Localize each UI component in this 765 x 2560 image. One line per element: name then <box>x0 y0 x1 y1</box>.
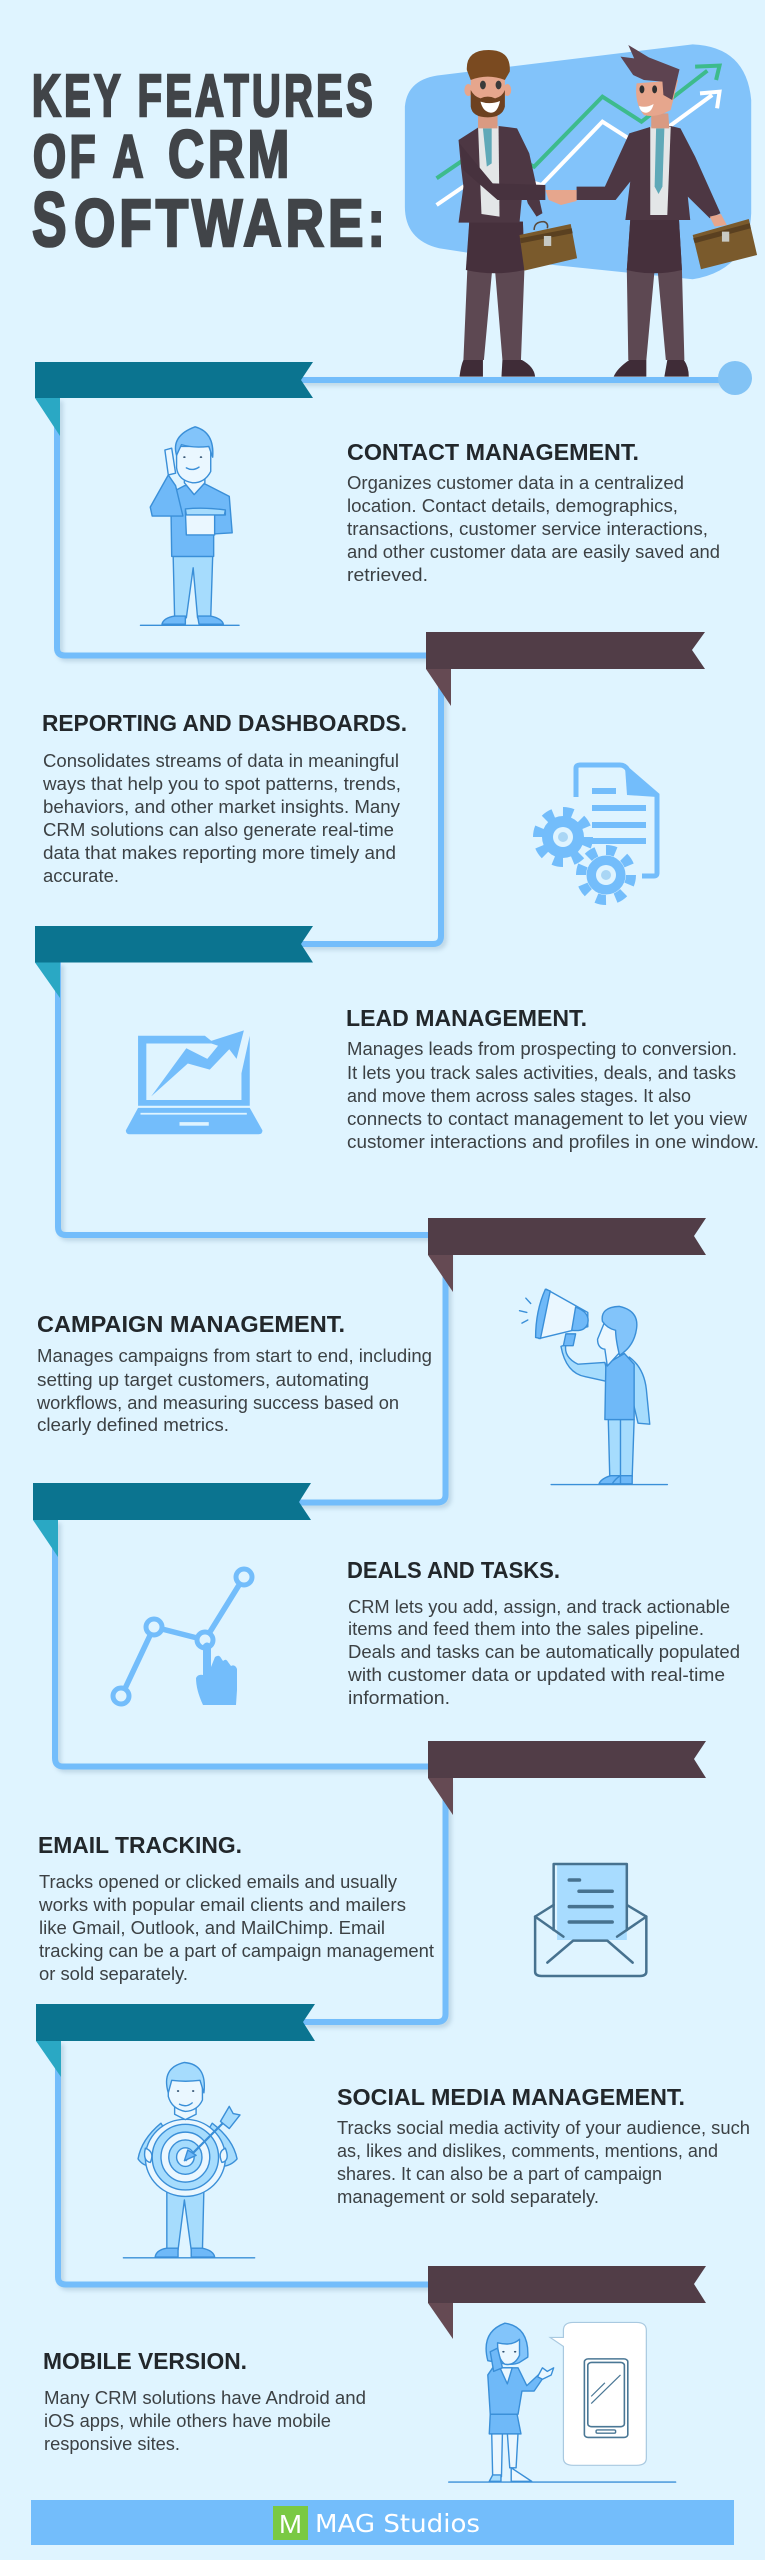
text block: Consolidates streams of data in meaningful <box>43 751 399 771</box>
panel: mobile version <box>43 2266 706 2482</box>
text block: CRM lets you add, assign, and track actionable <box>348 1597 730 1617</box>
text block <box>44 2388 366 2454</box>
ribbon <box>35 926 313 998</box>
text block: tracking can be a part of campaign management <box>39 1941 434 1961</box>
ribbon <box>35 362 313 436</box>
connector line <box>57 398 430 656</box>
icon: line chart with pointing hand <box>113 1569 252 1705</box>
footer bar <box>31 2500 734 2545</box>
blue backdrop blob <box>405 44 751 279</box>
text block: Organizes customer data in a centralized <box>347 473 684 493</box>
text block: data that makes reporting more timely and <box>43 843 396 863</box>
ribbon <box>428 1218 706 1292</box>
icon: man with megaphone <box>520 1289 667 1485</box>
brand name: MAG Studios <box>315 2509 480 2538</box>
connector line <box>303 1778 446 2022</box>
ribbon <box>33 1483 311 1557</box>
ribbon <box>36 2004 315 2077</box>
growth chart arrows <box>437 66 720 205</box>
text block: customer interactions and profiles in one window. <box>347 1132 759 1152</box>
heading: EMAIL TRACKING. <box>38 1832 242 1858</box>
ribbon <box>428 1741 706 1815</box>
text block: Deals and tasks can be automatically populated <box>348 1642 740 1662</box>
text block: workflows, and measuring success based on <box>36 1393 399 1413</box>
title: OFTWARE: <box>74 186 389 261</box>
panel: contact management <box>35 361 752 656</box>
text block: with customer data or updated with real-time <box>347 1665 725 1685</box>
title: S <box>32 177 70 263</box>
text block: iOS apps, while others have mobile <box>44 2411 331 2431</box>
panel: deals and tasks <box>33 1483 740 1766</box>
logo badge: M <box>279 2509 302 2539</box>
text block: and other customer data are easily saved and <box>347 542 720 562</box>
text block: transactions, customer service interactions, <box>347 519 708 539</box>
text block <box>347 1039 759 1152</box>
text block: CRM solutions can also generate real-time <box>43 820 394 840</box>
title: KEY FEATURES <box>32 63 376 129</box>
text block: Manages leads from prospecting to conversion. <box>347 1039 737 1059</box>
ribbon <box>426 632 705 706</box>
icon: laptop with rising arrow <box>126 1030 262 1134</box>
text block: clearly defined metrics. <box>37 1415 229 1435</box>
text block: ways that help you to spot patterns, trends, <box>42 774 401 794</box>
heading: LEAD MANAGEMENT. <box>346 1005 587 1031</box>
text block: Manages campaigns from start to end, including <box>37 1346 432 1366</box>
ribbon <box>428 2266 706 2339</box>
text block <box>42 751 401 886</box>
panel: reporting and dashboards <box>42 632 705 944</box>
heading: CONTACT MANAGEMENT. <box>347 439 639 465</box>
text block: or sold separately. <box>39 1964 188 1984</box>
text block: responsive sites. <box>44 2434 180 2454</box>
connector line <box>55 1520 432 1766</box>
text block: retrieved. <box>347 565 428 585</box>
left businessman <box>459 50 577 377</box>
text block: management or sold separately. <box>337 2187 599 2207</box>
title: OF A <box>33 123 147 190</box>
icon: woman with phone speech bubble <box>449 2322 676 2482</box>
heading: REPORTING AND DASHBOARDS. <box>42 710 407 736</box>
top connector line with end dot <box>300 361 752 395</box>
text block: and move them across sales stages. It also <box>347 1086 691 1106</box>
panel: lead management <box>35 926 759 1235</box>
icon: open envelope with letter <box>535 1864 646 1976</box>
text block: location. Contact details, demographics, <box>347 496 678 516</box>
text block: as, likes and dislikes, comments, mentions, and <box>337 2141 718 2161</box>
text block: information. <box>348 1688 450 1708</box>
panel: campaign management <box>36 1218 706 1502</box>
heading: DEALS AND TASKS. <box>347 1557 560 1583</box>
heading: CAMPAIGN MANAGEMENT. <box>37 1311 345 1337</box>
heading: MOBILE VERSION. <box>43 2348 247 2374</box>
logo badge <box>273 2506 308 2540</box>
text block: Tracks opened or clicked emails and usually <box>39 1872 397 1892</box>
text block <box>38 1872 434 1984</box>
text block: Tracks social media activity of your audience, such <box>337 2118 750 2138</box>
text block <box>337 2118 750 2207</box>
icon: man holding target with arrow <box>123 2062 255 2258</box>
text block: shares. It can also be a part of campaign <box>337 2164 662 2184</box>
icon: document with gears <box>538 765 657 900</box>
panel: social media management <box>36 2004 750 2284</box>
text block <box>347 1597 740 1708</box>
text block: like Gmail, Outlook, and MailChimp. Email <box>39 1918 385 1938</box>
illustration: two businessmen shaking hands <box>405 44 757 377</box>
title: CRM <box>168 117 293 192</box>
connector line <box>58 2041 432 2284</box>
heading: SOCIAL MEDIA MANAGEMENT. <box>337 2084 685 2110</box>
text block: behaviors, and other market insights. Many <box>43 797 400 817</box>
text block: works with popular email clients and mailers <box>38 1895 406 1915</box>
text block: connects to contact management to let you view <box>347 1109 748 1129</box>
text block: It lets you track sales activities, deals, and tasks <box>347 1063 736 1083</box>
right businessman <box>545 45 757 377</box>
connector line <box>58 962 432 1235</box>
connector line <box>300 665 441 944</box>
text block <box>36 1346 432 1435</box>
text block: accurate. <box>43 866 119 886</box>
connector line <box>298 1250 446 1502</box>
text block: setting up target customers, automating <box>37 1370 369 1390</box>
panel: email tracking <box>38 1741 706 2022</box>
text block <box>347 473 720 585</box>
text block: items and feed them into the sales pipeline. <box>348 1619 704 1639</box>
icon: man on phone holding book <box>140 427 239 625</box>
text block: Many CRM solutions have Android and <box>44 2388 366 2408</box>
title <box>32 63 389 263</box>
